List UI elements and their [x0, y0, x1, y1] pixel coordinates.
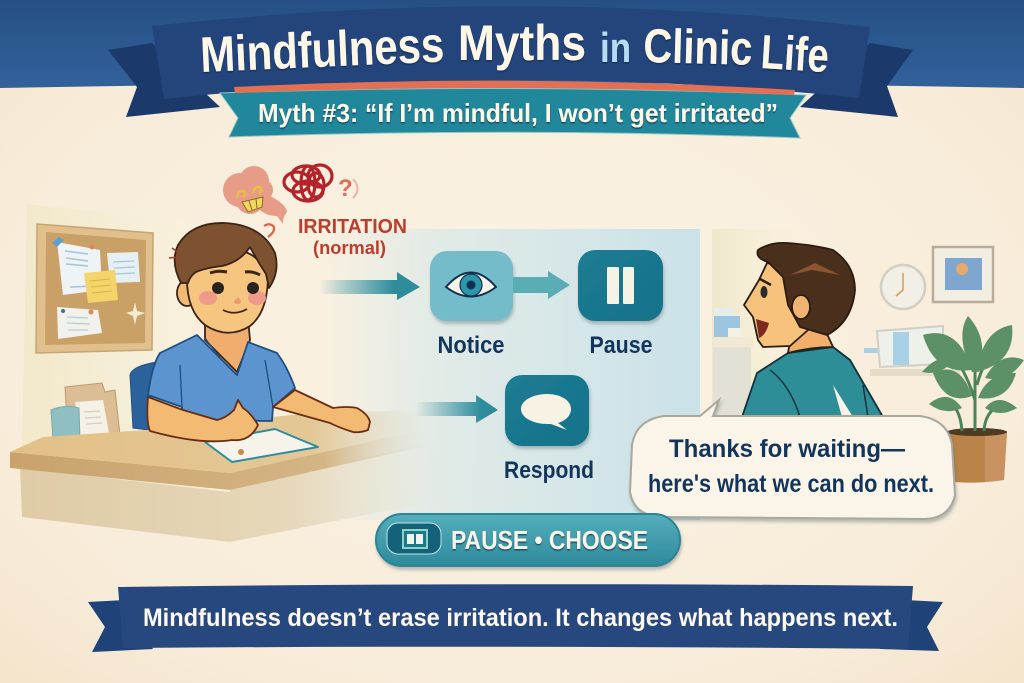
banner tails	[88, 600, 153, 652]
small question mark	[264, 224, 274, 237]
hair	[757, 243, 855, 335]
icon: mini pause	[403, 530, 427, 548]
nose	[234, 297, 241, 304]
chair	[130, 362, 157, 430]
subtitle text: Myth #3: “If I’m mindful, I won’t get irritated”	[258, 98, 778, 128]
title banner	[108, 6, 913, 138]
bracket mark	[353, 179, 358, 198]
red accent	[234, 81, 795, 95]
scene: patient in clinic	[712, 229, 1024, 483]
ear	[792, 295, 810, 319]
pot	[948, 431, 1007, 483]
cabinet and supplies	[713, 308, 753, 417]
eye	[760, 286, 768, 298]
irritation label	[298, 216, 407, 258]
face	[187, 249, 268, 333]
clock	[881, 265, 925, 309]
bubble shape	[630, 400, 955, 519]
pause choose pill	[376, 514, 680, 566]
question mark: ?	[338, 175, 353, 202]
banner main	[118, 584, 913, 649]
irritation label: (normal)	[313, 238, 386, 258]
notice label: Notice	[438, 332, 504, 359]
open mouth	[756, 319, 769, 338]
desk	[10, 411, 440, 542]
title text	[199, 15, 830, 83]
pill button	[387, 523, 441, 554]
title text: Mindfulness	[199, 16, 445, 83]
title text: Myths	[458, 15, 586, 71]
speech bubble: here's what we can do next.	[648, 470, 934, 498]
framed picture	[933, 247, 993, 302]
pause tile	[578, 250, 663, 321]
face	[744, 263, 808, 347]
left arm and hand	[147, 397, 258, 441]
respond label: Respond	[504, 457, 594, 484]
neck	[788, 325, 833, 353]
shirt	[742, 347, 883, 417]
title text: in	[600, 24, 631, 71]
ribbon tails	[108, 43, 220, 117]
icon: speech bubble	[521, 394, 571, 430]
notice tile	[430, 251, 513, 321]
cork board	[36, 224, 153, 353]
respond tile	[505, 375, 589, 446]
folder, paper and mug	[51, 383, 120, 442]
mouth	[223, 309, 247, 313]
eyes	[212, 282, 224, 294]
pill label: PAUSE • CHOOSE	[451, 525, 648, 555]
takeaway banner	[88, 584, 943, 652]
top blue band	[0, 0, 1024, 88]
brows	[210, 271, 260, 275]
step: pause	[578, 250, 663, 359]
panel: steps background	[330, 229, 700, 520]
clipboard	[205, 429, 318, 462]
man	[742, 243, 883, 417]
speech bubble	[630, 400, 955, 519]
arrow to pause	[513, 271, 570, 299]
title text: Life	[759, 26, 830, 83]
angry face	[237, 187, 263, 212]
arrow to notice	[320, 272, 420, 300]
title text: Clinic	[643, 20, 753, 76]
irritation label: IRRITATION	[298, 216, 407, 238]
person	[147, 223, 370, 462]
subtitle ribbon	[220, 88, 806, 138]
pill body	[376, 514, 680, 566]
hair	[175, 223, 277, 288]
right arm and hand	[273, 390, 370, 432]
plant	[922, 316, 1024, 483]
ribbon main	[152, 6, 870, 99]
alert ticks	[169, 248, 179, 258]
step: notice	[430, 251, 513, 359]
banner text: Mindfulness doesn’t erase irritation. It changes what happens next.	[143, 604, 898, 632]
wall panel	[22, 204, 215, 450]
neck	[205, 318, 250, 372]
step: respond	[504, 375, 594, 484]
brow	[760, 279, 771, 285]
ears	[177, 280, 197, 306]
arrow to respond	[415, 395, 498, 423]
scene: receptionist at desk	[10, 204, 440, 542]
icon: eye	[446, 272, 496, 296]
desk monitor and shelf	[864, 326, 960, 376]
pause label: Pause	[590, 332, 652, 359]
bubble text: Thanks for waiting—	[669, 435, 905, 463]
cheeks	[199, 291, 217, 305]
shirt	[148, 335, 295, 421]
red scribble	[284, 165, 332, 201]
thought cloud	[223, 166, 287, 237]
icon: pause bars	[607, 267, 634, 304]
wall panel	[712, 229, 812, 417]
